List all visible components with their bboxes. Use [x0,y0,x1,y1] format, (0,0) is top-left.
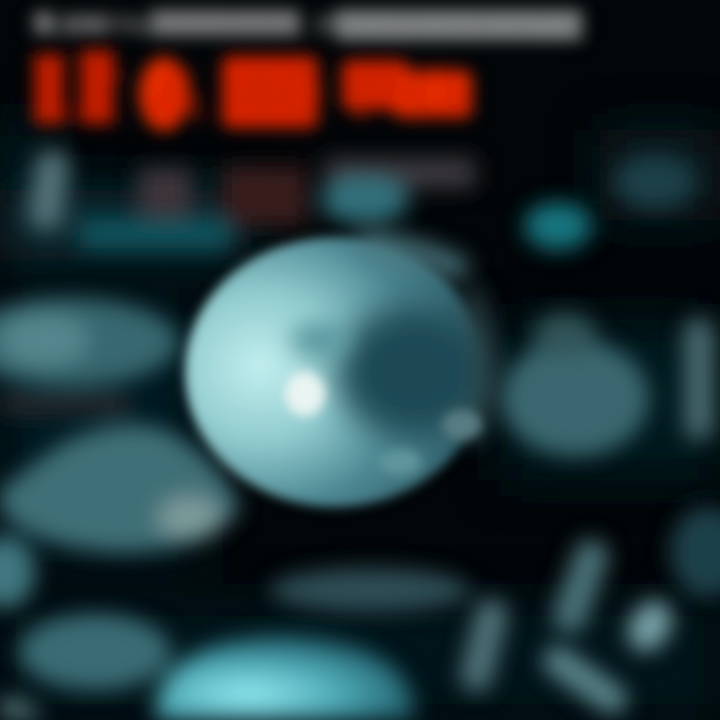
right coins [501,313,720,598]
left stacked coins [0,298,240,608]
faded reflection row [27,148,695,250]
lower pills [270,535,681,720]
bottom coins [0,614,415,720]
heading: top line: ALL NATURAL INGREDIENTS [32,9,582,40]
heading: red line: 17 & 40 PG [30,54,470,134]
central coin [185,237,488,507]
